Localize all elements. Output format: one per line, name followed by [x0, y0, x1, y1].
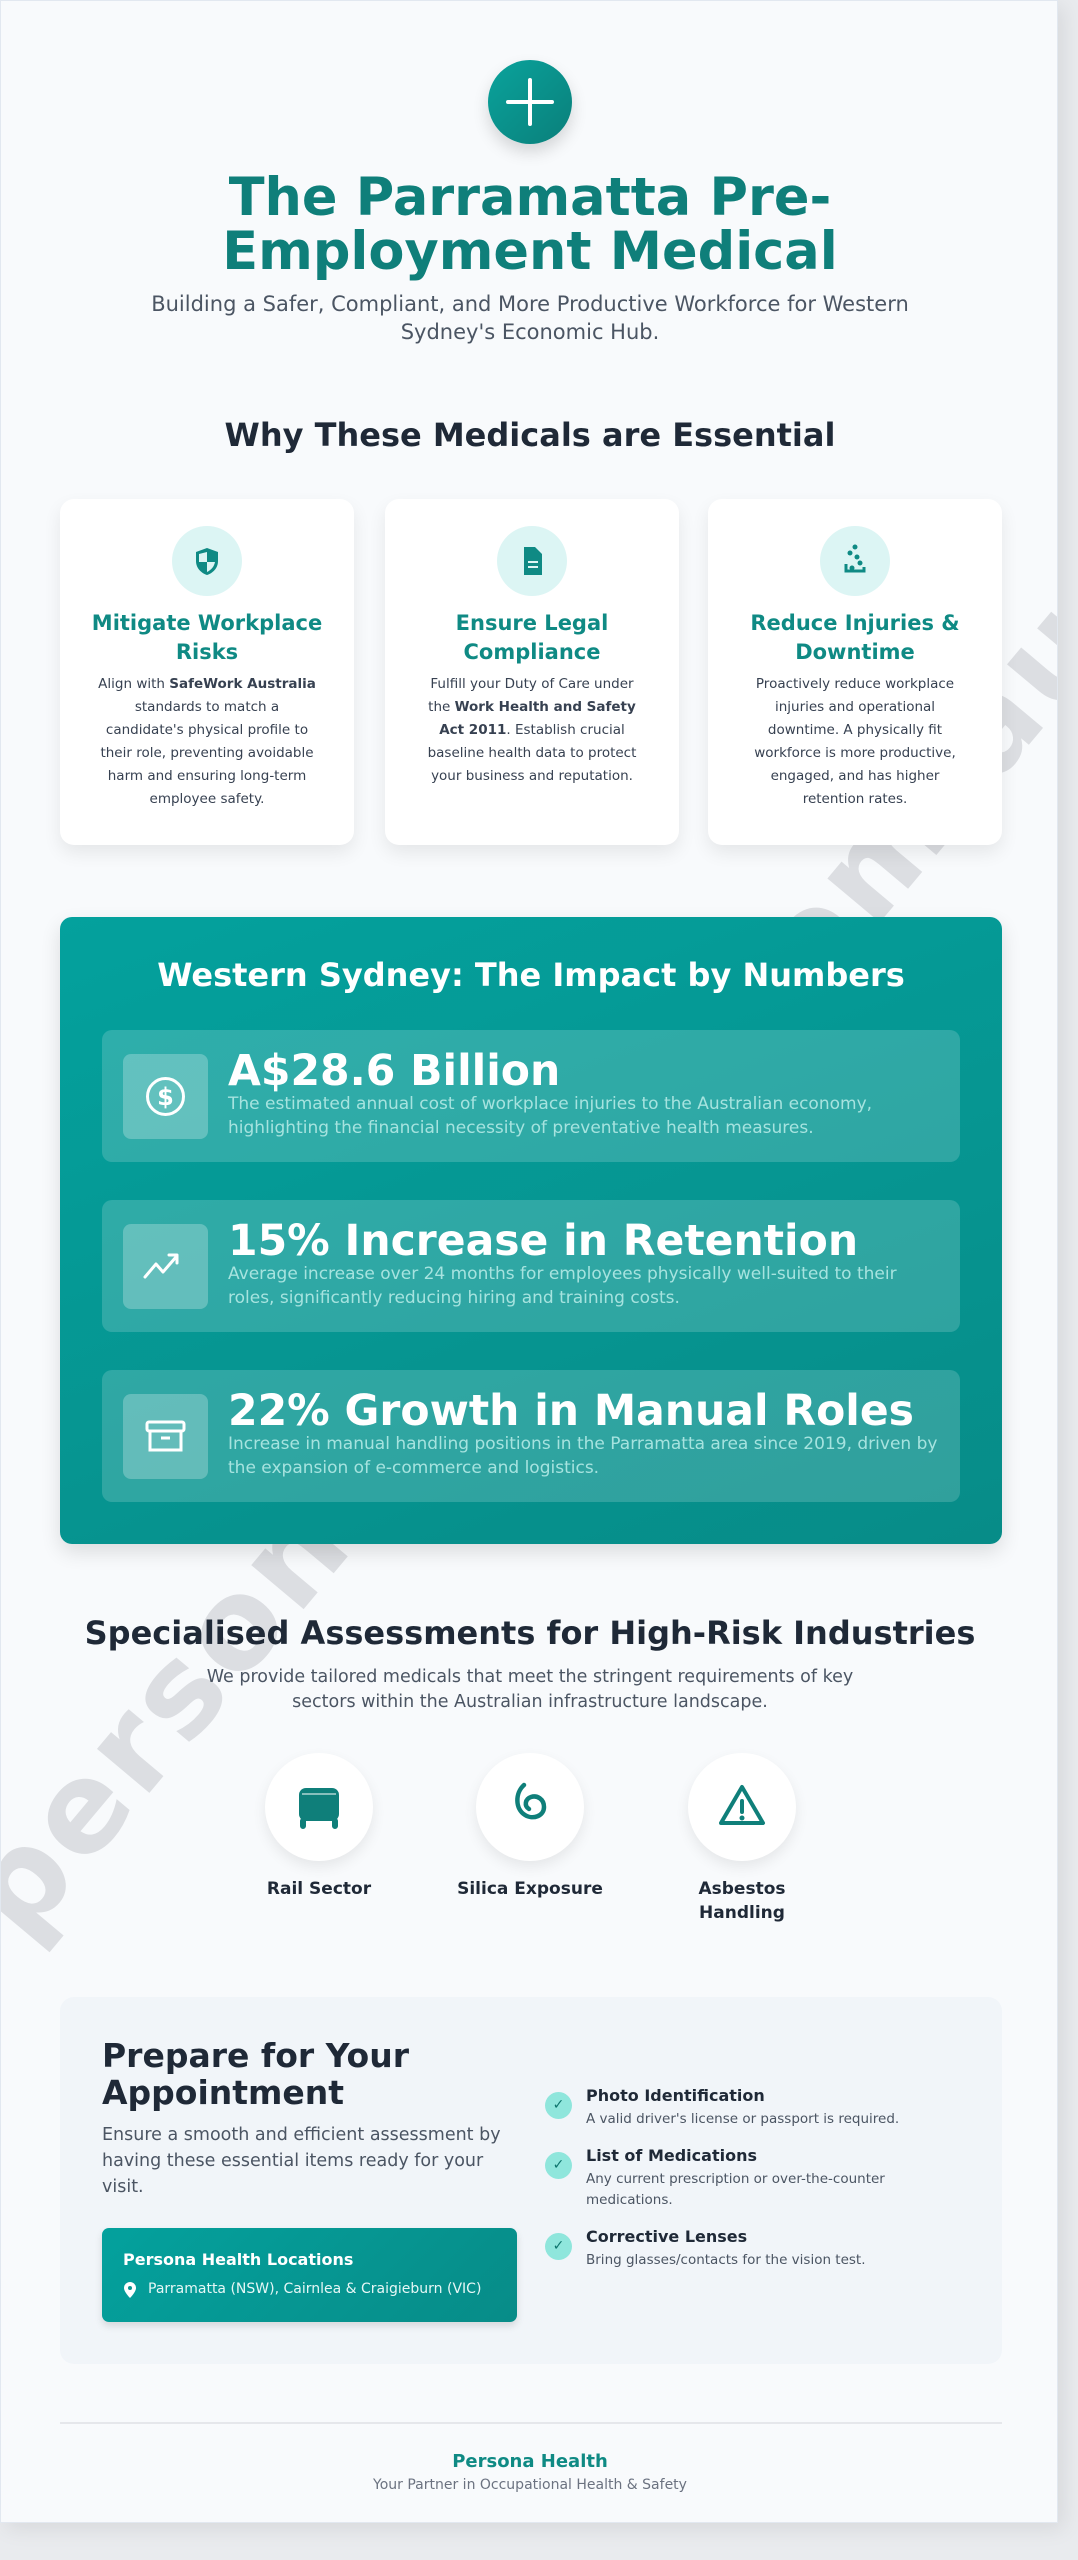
icon: silica: [476, 1753, 584, 1861]
footer: [373, 2451, 687, 2493]
heading: why essential: Why These Medicals are Essential: [225, 416, 835, 454]
panel: mitigate risks: Align with SafeWork Australia standards to match a candidate's physical profile to their role, preventing avoidable harm and ensuring long-term employee safety.: [98, 676, 316, 807]
panel: prepare appointment: Photo Identification: [586, 2086, 765, 2105]
checklist item: lenses: [545, 2227, 866, 2268]
stat: manual roles: 22% Growth in Manual Roles: [228, 1387, 914, 1436]
icon: dollar: [123, 1054, 208, 1139]
label: silica: Silica Exposure: [457, 1879, 603, 1899]
panel: prepare appointment: [60, 1997, 1002, 2364]
stat: cost: A$28.6 Billion: [228, 1047, 560, 1096]
checklist item: photo id: [545, 2086, 899, 2127]
icon: shield: [172, 526, 242, 596]
heading: impact: Western Sydney: The Impact by Numbers: [157, 956, 905, 994]
heading: prepare: Prepare for Your: [102, 2036, 409, 2075]
title: The Parramatta Pre-: [229, 167, 831, 228]
label: rail: Rail Sector: [267, 1879, 371, 1899]
panel: prepare appointment: ✓: [553, 2238, 564, 2254]
icon: box: [123, 1394, 208, 1479]
label: asbestos: Asbestos Handling: [698, 1879, 786, 1923]
panel: mitigate risks: Mitigate Workplace Risks: [92, 611, 322, 664]
callout: locations: Parramatta (NSW), Cairnlea & Craigieburn (VIC): [148, 2281, 481, 2297]
icon: falling: [820, 526, 890, 596]
stat: manual roles: [102, 1370, 960, 1502]
panel: reduce injuries: Proactively reduce workplace injuries and operational downtime. A physically fit workforce is more productive, engaged, and has higher retention rates.: [754, 676, 956, 807]
stat: retention: Average increase over 24 months for employees physically well-suited to their roles, significantly reducing hiring and training costs.: [228, 1264, 897, 1308]
panel: reduce injuries: Reduce Injuries & Downtime: [750, 611, 960, 664]
panel: legal compliance: Fulfill your Duty of Care under the Work Health and Safety Act 2011. Establish crucial baseline health data to protect your business and reputation.: [428, 676, 636, 784]
icon: asbestos warning: [688, 1753, 796, 1861]
panel: mitigate risks: [60, 499, 354, 845]
footer: Persona Health: [452, 2451, 608, 2472]
title: [222, 167, 838, 282]
stat: manual roles: Increase in manual handling positions in the Parramatta area since 2019, driven by the expansion of e-commerce and logistics.: [228, 1434, 937, 1478]
icon: document: [497, 526, 567, 596]
heading: prepare: [102, 2036, 409, 2112]
stat: cost: The estimated annual cost of workplace injuries to the Australian economy, highlighting the financial necessity of preventative health measures.: [228, 1094, 872, 1138]
heading: prepare: Appointment: [102, 2073, 344, 2112]
panel: prepare appointment: Any current prescription or over-the-counter medications.: [586, 2171, 885, 2208]
heading: specialised assessments: Specialised Assessments for High-Risk Industries: [85, 1614, 975, 1652]
text: prepare intro: Ensure a smooth and efficient assessment by having these essential items ready for your visit.: [102, 2125, 501, 2197]
text: assessments intro: We provide tailored medicals that meet the stringent requirements of key sectors within the Australian infrastructure landscape.: [207, 1667, 853, 1712]
icon: plus logo: [488, 60, 572, 144]
callout: locations: Persona Health Locations: [123, 2250, 353, 2269]
icon: rail: [265, 1753, 373, 1861]
footer: Your Partner in Occupational Health & Safety: [373, 2477, 687, 2493]
stat: retention: [102, 1200, 960, 1332]
panel: legal compliance: Ensure Legal Compliance: [456, 611, 608, 664]
title: Employment Medical: [222, 221, 838, 282]
icon: trend: [123, 1224, 208, 1309]
panel: reduce injuries: [708, 499, 1002, 845]
panel: prepare appointment: ✓: [553, 2157, 564, 2173]
checklist item: medications: [545, 2146, 885, 2208]
subtitle: Building a Safer, Compliant, and More Productive Workforce for Western Sydney's Economic Hub.: [151, 292, 909, 344]
stat: cost: [102, 1030, 960, 1162]
panel: prepare appointment: ✓: [553, 2097, 564, 2113]
stat: retention: 15% Increase in Retention: [228, 1217, 858, 1266]
panel: prepare appointment: A valid driver's license or passport is required.: [586, 2111, 899, 2127]
panel: prepare appointment: Bring glasses/contacts for the vision test.: [586, 2252, 866, 2268]
panel: prepare appointment: List of Medications: [586, 2146, 757, 2165]
panel: legal compliance: [385, 499, 679, 845]
panel: prepare appointment: Corrective Lenses: [586, 2227, 747, 2246]
panel: impact by numbers: [60, 917, 1002, 1544]
callout: locations: [102, 2228, 517, 2322]
icon: dollar: $: [157, 1083, 174, 1111]
